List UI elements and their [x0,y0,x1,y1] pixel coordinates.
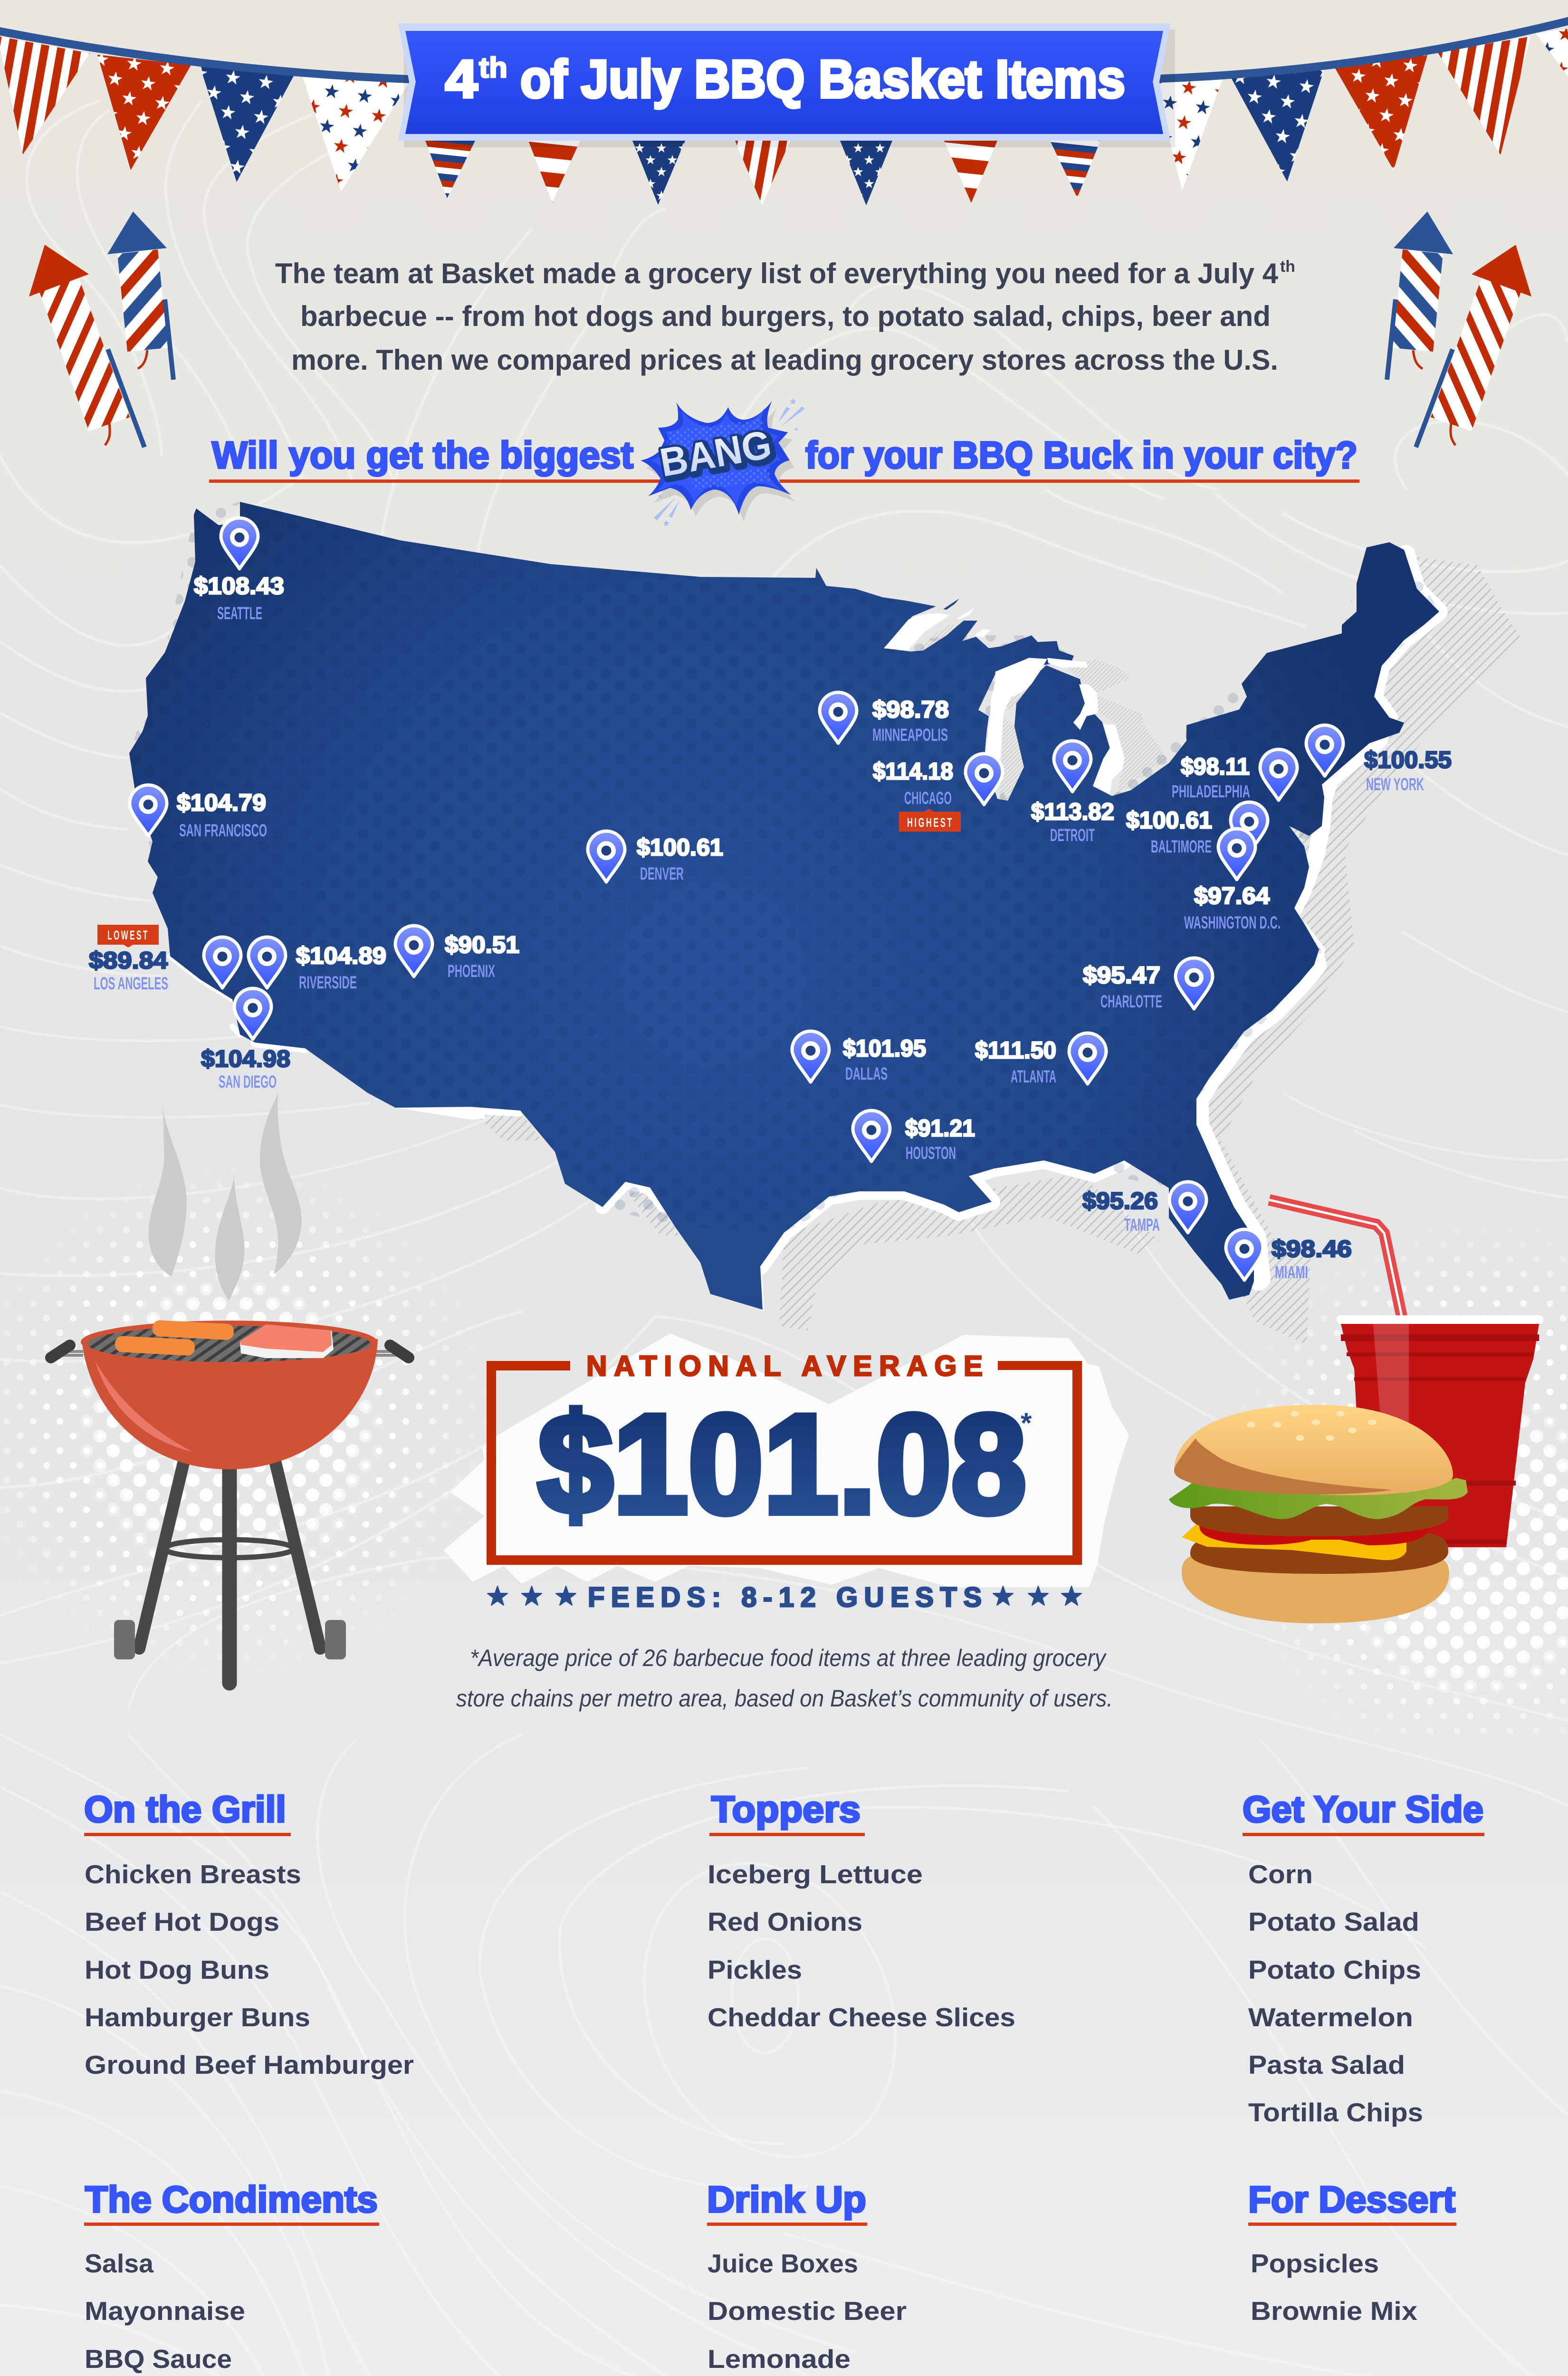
city pin: Chicago (highest): $114.18 [873,758,953,785]
city pin: Riverside: RIVERSIDE [299,973,357,992]
list: The Condiments [84,2178,379,2376]
list: For Dessert: Popsicles [1251,2249,1379,2278]
city pin: Houston [853,1111,975,1163]
headline question [209,434,1359,483]
list: On the Grill: Beef Hot Dogs [85,1907,279,1936]
city pin: Minneapolis [820,692,949,745]
city pin: Chicago (highest): CHICAGO [904,788,952,808]
city pin: San Diego [201,988,290,1092]
smoke [149,1093,302,1301]
grill illustration [51,1093,409,1683]
list: The Condiments: BBQ Sauce [85,2344,232,2374]
sausages [152,1320,234,1340]
list: Get Your Side [1243,1788,1484,2127]
footnote [456,1645,1113,1712]
list: Drink Up: Juice Boxes [708,2249,858,2278]
city pin: Denver: DENVER [640,864,684,883]
list: Toppers: Pickles [708,1955,802,1984]
list: Get Your Side: Corn [1248,1859,1313,1889]
list: Toppers: Toppers [711,1788,860,1830]
bowl [82,1339,378,1469]
title text: 4 [445,49,478,109]
city pin: Denver [588,831,723,883]
city pin: Philadelphia [1172,749,1297,801]
burger illustration [1169,1405,1468,1623]
city pin: San Francisco: SAN FRANCISCO [179,821,267,840]
city pin: Baltimore: $100.61 [1126,807,1212,834]
city pin: Houston: $91.21 [905,1115,975,1141]
city pin: Charlotte [1083,958,1213,1011]
footnote: *Average price of 26 barbecue food items at three leading grocery [470,1645,1107,1671]
city pin: Phoenix: $90.51 [445,931,519,958]
firework rockets: right [1387,211,1531,447]
city pin: Baltimore [1126,802,1268,856]
label: NATIONAL AVERAGE [586,1350,983,1382]
city pin: Miami [1226,1229,1352,1282]
city pin: New York: NEW YORK [1366,775,1424,794]
handles [57,1351,402,1355]
big price: $101.08 [538,1385,1026,1542]
city pin: Phoenix: PHOENIX [448,961,495,981]
bang burst icon: BANG [657,422,775,485]
city pin: Denver: $100.61 [637,834,723,861]
city pin: Los Angeles (lowest): LOWEST [107,928,149,942]
list: Get Your Side: Get Your Side [1243,1788,1483,1830]
list: On the Grill: Chicken Breasts [85,1859,301,1889]
list: On the Grill: Hot Dog Buns [85,1955,269,1984]
list: Toppers: Red Onions [708,1907,862,1936]
city pin: Riverside: $104.89 [296,942,386,969]
city pin: Washington D.C.: $97.64 [1194,882,1270,909]
city pin: Tampa: TAMPA [1124,1215,1160,1235]
map: white border strip with Mexico [395,1107,523,1120]
national average callout [444,1333,1129,1613]
city pin: Riverside [249,937,386,992]
city pin: Charlotte: $95.47 [1083,962,1160,988]
list: On the Grill: Hamburger Buns [85,2002,310,2032]
city pin: Philadelphia: PHILADELPHIA [1172,782,1250,801]
steak [240,1326,334,1358]
city pin: Los Angeles (lowest) [89,925,241,993]
city pin: San Diego: $104.98 [201,1045,290,1072]
list: For Dessert: Brownie Mix [1251,2296,1417,2326]
headline question: Will you get the biggest [212,434,633,476]
city pin: Dallas: $101.95 [843,1035,926,1062]
list: Get Your Side: Potato Salad [1248,1907,1419,1936]
city pin: New York [1306,725,1452,794]
list: Get Your Side: Potato Chips [1248,1955,1421,1984]
red cup illustration [1269,1200,1543,1547]
city pin: New York: $100.55 [1364,747,1452,773]
brush background [444,1333,1129,1587]
list: The Condiments: Mayonnaise [85,2296,245,2326]
map: hatch shading off the coasts [475,556,1520,1345]
city pin: Washington D.C. [1184,829,1281,932]
legs [139,1461,320,1683]
city pin: Dallas: DALLAS [845,1064,888,1083]
list: Toppers [708,1788,1015,2032]
star row [488,1586,1081,1605]
title banner [398,23,1175,147]
city pin: Minneapolis: $98.78 [872,696,949,723]
list: For Dessert [1248,2178,1456,2326]
halftone: grill [3,1197,459,1646]
map: Great Lakes white shorelines [884,598,1125,795]
city pin: Baltimore: BALTIMORE [1151,837,1212,856]
city pin: Tampa [1082,1182,1206,1235]
city pin: Los Angeles (lowest): LOS ANGELES [94,974,168,993]
city pin: Seattle: SEATTLE [217,604,262,623]
bunting rope [0,20,1568,79]
map: white shoreline [170,554,1439,1310]
list: Toppers: Cheddar Cheese Slices [708,2002,1015,2032]
list: Drink Up: Drink Up [707,2178,866,2220]
city pin: Miami: $98.46 [1272,1236,1352,1262]
feeds: FEEDS: 8-12 GUESTS [588,1582,982,1613]
city pin: Tampa: $95.26 [1082,1188,1158,1214]
city pin: Detroit [1031,741,1114,845]
intro paragraph: barbecue -- from hot dogs and burgers, to potato salad, chips, beer and [300,300,1271,332]
halftone: cup and burger [1267,1256,1568,1734]
city pin: Atlanta [975,1033,1106,1086]
intro paragraph: th [1280,258,1295,276]
list: Get Your Side: Tortilla Chips [1248,2098,1423,2127]
list: The Condiments: Salsa [85,2249,153,2278]
list: Get Your Side: Watermelon [1248,2002,1413,2032]
bang burst icon: BANG [659,424,777,488]
city pin: Atlanta: ATLANTA [1011,1067,1056,1086]
list: On the Grill: On the Grill [84,1788,286,1830]
list: On the Grill: Ground Beef Hamburger [85,2050,414,2079]
intro paragraph: The team at Basket made a grocery list of everything you need for a July 4 [275,258,1279,289]
title text: th [479,52,507,84]
city pin: Houston: HOUSTON [906,1143,956,1163]
city pin: Seattle [194,518,284,623]
city pin: Atlanta: $111.50 [975,1037,1056,1063]
list: The Condiments: The Condiments [85,2178,378,2220]
city pin: Washington D.C.: WASHINGTON D.C. [1184,913,1281,932]
bunting: left flags [0,37,409,192]
footnote: store chains per metro area, based on Basket’s community of users. [456,1685,1113,1712]
city pin: Chicago (highest) [873,754,1003,832]
city pin: Detroit: $113.82 [1031,798,1114,825]
straw [1269,1200,1402,1316]
list: For Dessert: For Dessert [1248,2178,1455,2220]
list: Get Your Side: Pasta Salad [1248,2050,1405,2079]
city pin: San Diego: SAN DIEGO [219,1072,277,1092]
city pin: Dallas [792,1031,926,1083]
intro paragraph [275,258,1295,376]
bunting: flags under title banner [425,141,1100,205]
city pin: Los Angeles (lowest): $89.84 [89,947,168,974]
title text: of July BBQ Basket Items [520,49,1125,109]
city pin: San Francisco: $104.79 [177,789,266,816]
city pin: Phoenix [395,926,519,981]
list: Drink Up: Lemonade [708,2344,851,2374]
bunting: right flags [1155,29,1568,191]
map: contiguous United States [129,502,1439,1310]
asterisk: * [1021,1407,1032,1439]
frame [487,1361,1082,1565]
headline question: for your BBQ Buck in your city? [805,434,1358,476]
city pin: Philadelphia: $98.11 [1181,753,1250,780]
city pin: Detroit: DETROIT [1050,825,1095,845]
city pin: Miami: MIAMI [1275,1263,1308,1282]
list: Drink Up [707,2178,907,2376]
firework rockets: left [29,211,173,447]
list: Drink Up: Domestic Beer [708,2296,907,2326]
city pin: Seattle: $108.43 [194,573,284,599]
intro paragraph: more. Then we compared prices at leading grocery stores across the U.S. [291,344,1278,376]
city pin: Chicago (highest): HIGHEST [907,815,954,830]
list: On the Grill [84,1788,414,2079]
city pin: Charlotte: CHARLOTTE [1100,992,1162,1011]
bang burst icon [641,398,805,527]
city pin: San Francisco [130,785,267,840]
city pin: Minneapolis: MINNEAPOLIS [872,725,948,745]
list: Toppers: Iceberg Lettuce [708,1859,923,1889]
